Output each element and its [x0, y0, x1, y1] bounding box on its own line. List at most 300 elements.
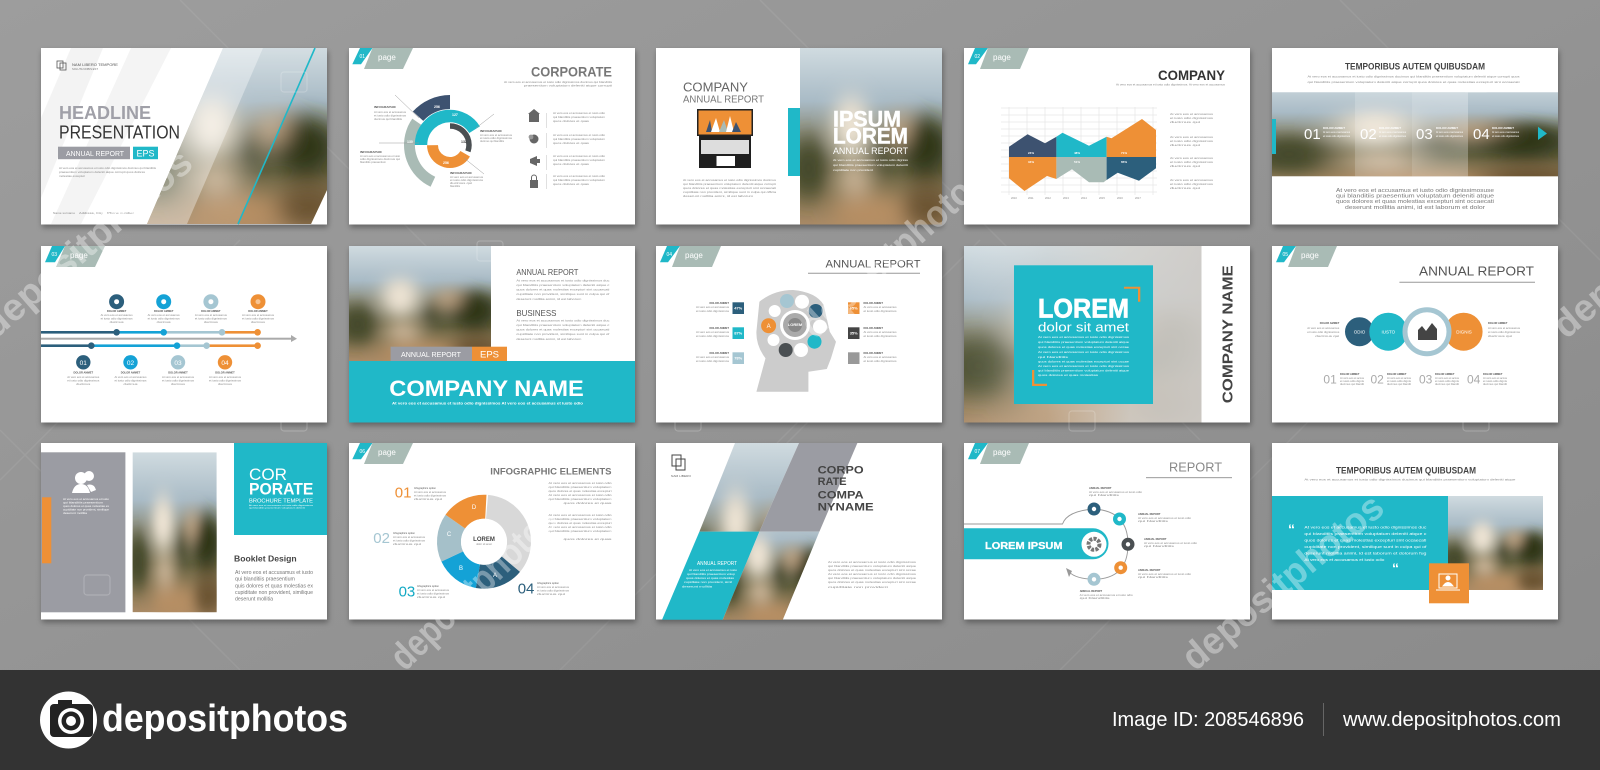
page tag 03: [45, 246, 105, 267]
cyan header block: [234, 443, 327, 535]
right text: DOLOR AMMET: [1488, 321, 1508, 325]
annual report block: cupiditate non provident, similique sunt in culpa qui of: [516, 292, 610, 296]
right text block: quos dolores et quas: [564, 537, 613, 541]
left text: At vero eos et accusamus: [1307, 326, 1340, 330]
card text: quos dolores et quas molestias excepturi sint occae: [1038, 345, 1130, 349]
lorem ipsum: LOREM IPSUM: [985, 540, 1063, 552]
number 04: Infographics option: [537, 581, 559, 585]
ring chart: C: [447, 532, 452, 538]
footer bar: [0, 670, 1600, 770]
subtitle: qui blanditiis praesentium voluptatum deleniti atque corrupti quos dolores et quas molestias excepturi sint occaecati: [1308, 80, 1520, 84]
card text: At vero eos et accusamus et iusto odio dignissimos: [1038, 350, 1130, 354]
numbered list: 04: [1467, 372, 1481, 386]
step labels: At vero eos et accusamus et iusto odio: [1080, 593, 1133, 597]
top labels: At vero eos et accusamus: [148, 313, 180, 317]
corporate company name: NYNAME: [818, 502, 874, 514]
brochure template: BROCHURE TEMPLATE: [249, 499, 313, 505]
cyan parallelogram: [662, 532, 759, 620]
heading on photo: LOREM: [833, 123, 908, 148]
heading on photo: [833, 107, 908, 148]
page tag 01: page: [378, 53, 396, 62]
left stats: 78%: [734, 356, 743, 360]
EPS label: EPS: [480, 350, 499, 360]
body text: quos dolores et quas molestias excepturi sint occae: [828, 580, 917, 584]
right stat text: et iusto odio dignissimos: [864, 334, 897, 338]
booklet heading: Booklet Design: [234, 554, 297, 564]
brand logo: [40, 692, 97, 748]
ring centre label: [473, 537, 495, 546]
vertical company name: COMPANY NAME: [1220, 265, 1237, 403]
page tag 05: page: [1301, 251, 1319, 260]
connector arc: [964, 509, 1128, 579]
logo: SOLUTA NOBIS EST: [72, 68, 99, 71]
left text: DOLOR AMMET: [1320, 321, 1340, 325]
x axis labels: 2014: [1081, 196, 1087, 200]
ring centre label: LOREM: [473, 537, 495, 543]
number 03: Infographics option: [417, 584, 439, 588]
numbered list text: et iusto odio dignis: [1387, 379, 1412, 383]
right text: At vero eos et accusamus: [1488, 326, 1521, 330]
top labels: At vero eos et accusamus: [242, 313, 275, 317]
step labels: At vero eos et accusamus et iusto odio: [1138, 516, 1192, 520]
footer text: Phone number: [107, 211, 134, 215]
quote text: [1304, 526, 1428, 562]
timeline lines: [41, 329, 297, 349]
image id: Image ID: 208546896: [1112, 709, 1304, 731]
page tag 04: 04: [666, 252, 672, 258]
quote text: At vero eos et accusamus et iusto odio dignissimos duc: [1304, 526, 1427, 530]
chart notes: At vero eos et accusamus: [1170, 178, 1214, 182]
bottom labels: ducimus: [171, 382, 186, 386]
left stat text: At vero eos et accusamus: [696, 355, 730, 359]
heading: [249, 465, 313, 498]
step labels: At vero eos et accusamus et iusto odio: [1138, 572, 1192, 576]
annual report on photo: ANNUAL REPORT: [833, 146, 908, 157]
area chart: 65%: [1121, 160, 1127, 164]
numbered circles: 03: [174, 360, 182, 367]
number 03: [399, 584, 450, 601]
body text: cupiditate non provident: [828, 585, 889, 589]
watermarks: [0, 141, 1600, 679]
text on cyan: At vero eos et accusamus et iusto: [689, 568, 737, 572]
area chart: 34%: [1028, 160, 1034, 164]
numbered list text: ducimus qui blandit: [1387, 382, 1411, 386]
right text block: qui blanditiis praesentium voluptatum: [548, 497, 612, 501]
step text: DOLOR AMMET: [1492, 126, 1514, 130]
head nodes: A: [767, 324, 771, 330]
step numbers: [1304, 126, 1490, 143]
body text: At vero eos et accusamus et iusto odio dignissimosuse: [1336, 188, 1494, 194]
label: infographic right: INFOGRAPHIC: [480, 129, 502, 133]
panel: lorem dolor sit amet: [945, 246, 1250, 430]
number 02: ducimus qui: [393, 542, 422, 546]
left stat text: DOLOR AMMET: [710, 351, 729, 355]
watermarks: depositphotos: [793, 158, 996, 347]
page tag 01: [352, 48, 413, 69]
numbered list text: DOLOR AMMET: [1387, 372, 1407, 376]
text on photo: At vero eos et accusamus et iusto odio digniss: [833, 158, 909, 162]
annual report block: [516, 267, 610, 301]
photo: diagonal blurred city: [147, 48, 327, 224]
booklet text: cupiditate non provident, similique: [235, 590, 313, 596]
page tag 06: page: [378, 448, 396, 457]
top labels: DOLOR AMMET: [248, 309, 268, 313]
bottom labels: At vero eos et accusamus: [67, 375, 100, 379]
right text: et iusto odio dignissimos: [1488, 330, 1521, 334]
top labels: DOLOR AMMET: [201, 309, 221, 313]
number 02: Infographics option: [393, 531, 415, 535]
numbered circles: 02: [127, 360, 134, 367]
title: INFOGRAPHIC ELEMENTS: [490, 467, 612, 477]
number 02: 02: [373, 530, 390, 547]
logo: NAM LIBERO TEMPORE: [72, 63, 119, 67]
annual report label: [58, 147, 130, 159]
right stat text: DOLOR AMMET: [864, 301, 883, 305]
page tag 06: [352, 443, 413, 464]
chart notes: At vero eos et accusamus: [1170, 135, 1214, 139]
panel: company area chart: [964, 48, 1250, 224]
label: infographic left: At vero eos et accusamus et iusto: [360, 154, 401, 158]
page tag 07: 07: [974, 449, 980, 455]
subheading: dolor sit amet: [1038, 320, 1129, 335]
label: infographic top left: [374, 105, 407, 121]
overlapping circles: [1345, 310, 1483, 354]
subline: At vero eos et accusamus et iusto odio dignissimos At vero eos et accusamus et iusto odio: [392, 402, 583, 406]
quote text: At vero eos et accusamus et iusto odio: [1304, 558, 1384, 562]
photo: [349, 246, 491, 361]
label: infographic bottom: INFOGRAPHIC: [450, 171, 472, 175]
panel: corporate company diagonal: [656, 443, 942, 630]
bottom labels: ducimus: [218, 382, 233, 386]
numbered list text: DOLOR AMMET: [1483, 372, 1503, 376]
footer text: Name surname: [53, 211, 76, 215]
body text: cupiditate non provident, similique sunt in culpa qui officia: [683, 190, 777, 194]
left stat text: [696, 301, 730, 363]
right stat text: At vero eos et accusamus: [864, 355, 897, 359]
label: infographic right: et iusto odio dignissimos: [480, 136, 513, 140]
panel: corporate brochure: [41, 443, 327, 620]
booklet text: [235, 570, 313, 603]
icon list text: quos dolores et quas: [553, 162, 590, 166]
panel: temporibus quote: [1272, 443, 1558, 620]
brand name: depositphotos: [102, 698, 348, 740]
title: TEMPORIBUS AUTEM QUIBUSDAM: [1336, 465, 1476, 475]
right stat text: At vero eos et accusamus: [864, 305, 897, 309]
text on cyan: [682, 568, 737, 588]
bottom labels: DOLOR AMMET: [74, 370, 93, 374]
quote text: quos dolores et quas molestias excepturi sint occaecati: [1304, 538, 1427, 542]
panel: head infographic: [656, 246, 942, 422]
panel: company name: [338, 246, 635, 422]
icon list text: qui blanditiis praesentium voluptatum: [553, 137, 605, 141]
arrowhead: [1066, 568, 1072, 577]
ring chart: 132: [461, 140, 467, 144]
right text: ducimus qui: [1488, 334, 1513, 338]
bottom labels: DOLOR AMMET: [215, 370, 235, 374]
left stat text: At vero eos et accusamus: [696, 305, 730, 309]
right text block: quos dolores et quas molestias excepturi: [548, 521, 612, 525]
body text: deserunt mollitia animi, id est laborum: [683, 194, 753, 198]
annual report block: At vero eos et accusamus et iusto odio dignissimos duc: [516, 278, 610, 282]
area chart: 51%: [1074, 160, 1080, 164]
step labels: ANNUAL REPORT: [1080, 589, 1103, 593]
numbered list text: et iusto odio dignis: [1483, 379, 1508, 383]
top labels: et iusto odio dignissimos: [101, 316, 133, 320]
right text block: [548, 481, 613, 541]
label: infographic top left: ducimus qui blanditiis: [374, 117, 403, 121]
right text block: At vero eos et accusamus et iusto odio: [548, 481, 612, 485]
left stats: [732, 302, 744, 364]
bottom labels: [67, 370, 242, 386]
number 02: At vero eos et accusamus: [393, 535, 426, 539]
bottom labels: DOLOR AMMET: [168, 370, 188, 374]
numbered list: 03: [1419, 372, 1433, 386]
numbered list: 02: [1370, 372, 1384, 386]
page tag 05: [1276, 246, 1337, 267]
body text: At vero eos et accusamus et iusto odio dignissimos ducimus: [683, 178, 777, 182]
overlapping circles: DIGNIS: [1456, 330, 1472, 334]
label: infographic right: At vero eos et accusamus: [480, 133, 513, 137]
top icons: [109, 294, 265, 309]
top labels: et iusto odio dignissimos: [242, 316, 275, 320]
EPS label: [133, 147, 158, 159]
top labels: et iusto odio dignissimos: [195, 316, 228, 320]
panel: timeline: [41, 246, 327, 422]
annual report block: ANNUAL REPORT: [516, 267, 578, 277]
step numbers: 04: [1473, 126, 1490, 143]
text on cyan: quos dolores et quas molestias: [686, 576, 735, 580]
logo: [57, 61, 119, 71]
x axis labels: 2011: [1028, 196, 1034, 200]
icon list text: [553, 111, 606, 186]
step labels: ANNUAL REPORT: [1138, 568, 1161, 572]
corporate company name: CORPO: [818, 464, 864, 476]
bottom labels: At vero eos et accusamus: [162, 375, 195, 379]
area chart: [1009, 119, 1156, 191]
numbered list text: et iusto odio dignis: [1340, 379, 1365, 383]
annual report label: ANNUAL REPORT: [66, 151, 125, 158]
footer text: [53, 211, 134, 215]
right stat text: [864, 301, 897, 363]
numbered list text: At vero eos et accus: [1435, 376, 1460, 380]
right text block: quos dolores et quas: [564, 501, 613, 505]
panel: temporibus photo strip: [1249, 48, 1581, 224]
icon list text: At vero eos et accusamus et iusto odio: [553, 154, 606, 158]
icon list text: At vero eos et accusamus et iusto odio: [553, 133, 606, 137]
number 03: 03: [399, 584, 415, 601]
right text: [1488, 321, 1521, 338]
number 03: At vero eos et accusamus: [417, 588, 450, 592]
right text block: qui blanditiis praesentium voluptatum: [548, 485, 612, 489]
card text: At vero eos et accusamus et iusto odio dignissimos: [1038, 364, 1130, 368]
body text: At vero eos et accusamus et iusto odio dignissimos ducimus qui blanditiis: [59, 166, 157, 170]
heading: LOREM: [1038, 294, 1129, 324]
top labels: ducimus: [204, 320, 219, 324]
text on cyan: deserunt mollitia: [682, 584, 713, 588]
website: www.depositphotos.com: [1342, 709, 1561, 731]
title: TEMPORIBUS AUTEM QUIBUSDAM: [1345, 61, 1485, 71]
step numbers: 01: [1304, 126, 1321, 143]
step labels: qui blanditiis: [1138, 575, 1169, 579]
number 04: 04: [518, 580, 534, 597]
right stat text: et iusto odio dignissimos: [864, 309, 897, 313]
x axis labels: 2012: [1045, 196, 1051, 200]
corporate company name: RATE: [818, 476, 847, 488]
body text: [1336, 188, 1494, 211]
bottom labels: At vero eos et accusamus: [209, 375, 242, 379]
orange square: [1429, 563, 1469, 603]
top labels: ducimus: [251, 320, 266, 324]
label: infographic bottom: et iusto odio dignissimos: [450, 178, 484, 182]
heading: COR: [249, 465, 287, 484]
x axis labels: 2010: [1011, 196, 1017, 200]
right text block: At vero eos et accusamus et iusto odio: [548, 513, 612, 517]
step numbers: 03: [1416, 126, 1433, 143]
body text: qui blanditiis praesentium voluptatum deleniti atque: [828, 576, 917, 580]
cyan card: [1014, 265, 1153, 404]
business block: qui blanditiis praesentium voluptatum deleniti atque c: [516, 323, 610, 327]
bottom labels: et iusto odio dignissimos: [67, 378, 100, 382]
body text: At vero eos et accusamus et iusto odio dignissimos: [828, 560, 917, 564]
area chart: 48%: [1074, 151, 1080, 155]
panel: corporate donut: [349, 48, 635, 224]
right stat text: At vero eos et accusamus: [864, 330, 897, 334]
left text: [1307, 321, 1340, 338]
label: infographic bottom: ducimus qui: [450, 181, 473, 185]
label: infographic right: ducimus qui blanditiis: [480, 139, 505, 143]
chart notes: ducimus qui: [1170, 120, 1201, 124]
text on cyan: cupiditate non provident, simil: [684, 580, 732, 584]
grid: [1001, 107, 1157, 195]
step labels: [1080, 486, 1198, 600]
header lines: At vero eos et accusamus et iusto odio dignissimos: [249, 504, 313, 507]
chart notes: ducimus qui: [1170, 143, 1201, 147]
text on cyan: qui blanditiis praesentium volup: [687, 572, 736, 576]
numbered list text: ducimus qui blandit: [1340, 382, 1364, 386]
numbered list text: DOLOR AMMET: [1435, 372, 1455, 376]
bottom labels: et iusto odio dignissimos: [209, 378, 242, 382]
subtitle: At vero eos et accusamus et iusto odio dignissimos ducimus qui blanditiis praesentium voluptatum deleniti atque: [1304, 478, 1516, 482]
subtitle: At vero eos et accusamus et iusto odio dignissimos ducimus qui blanditiis praesentium voluptatum deleniti atque corrupti quos: [1308, 74, 1521, 78]
booklet text: qui blanditiis praesentium: [235, 577, 295, 583]
top labels: ducimus: [157, 320, 172, 324]
step circles: [1088, 502, 1134, 586]
quote marks: [1288, 521, 1399, 576]
ring centre label: dolor sit amet: [476, 542, 492, 546]
photo strip: [1249, 79, 1581, 194]
EPS label: EPS: [136, 148, 155, 158]
corporate company name: [818, 464, 874, 514]
left stat text: DOLOR AMMET: [710, 301, 729, 305]
number 03: ducimus qui: [417, 595, 446, 599]
number 04: ducimus qui: [537, 592, 566, 596]
icon: people: [72, 471, 96, 493]
icon list text: At vero eos et accusamus et iusto odio: [553, 174, 606, 178]
photo: [800, 48, 942, 224]
card text: At vero eos et accusamus et iusto odio dignissimos: [1038, 335, 1130, 339]
numbered list text: et iusto odio dignis: [1435, 379, 1460, 383]
right text block: qui blanditiis praesentium voluptatum: [548, 517, 612, 521]
business block: [516, 308, 610, 341]
top labels: At vero eos et accusamus: [101, 313, 133, 317]
ring chart: [435, 492, 533, 591]
left text: et iusto odio dignissimos: [1307, 330, 1340, 334]
bottom labels: et iusto odio dignissimos: [162, 378, 195, 382]
logo: NAM LIBERO: [671, 474, 691, 478]
card text: quos dolores et quas molestias: [1038, 373, 1099, 377]
body text: [683, 178, 777, 198]
right text block: At vero eos et accusamus et iusto odio: [548, 493, 612, 497]
right stat text: et iusto odio dignissimos: [864, 359, 897, 363]
numbered circles: 04: [221, 360, 229, 367]
photo: [1448, 496, 1543, 590]
ring chart: 130: [407, 140, 413, 144]
x axis labels: 2015: [1099, 196, 1105, 200]
numbered list text: At vero eos et accus: [1340, 376, 1365, 380]
top labels: DOLOR AMMET: [154, 309, 174, 313]
quote marks: “: [1288, 521, 1295, 537]
icon list text: qui blanditiis praesentium voluptatum: [553, 115, 605, 119]
cyan band: [349, 361, 635, 422]
orange accent: [42, 497, 51, 563]
number 01: At vero eos et accusamus: [414, 490, 447, 494]
corporate company name: COMPA: [818, 489, 864, 501]
column text: At vero eos et accusamus et iusto: [63, 497, 109, 501]
step labels: qui blanditiis: [1080, 596, 1111, 600]
label: infographic left: INFOGRAPHIC: [360, 150, 382, 154]
left stat text: et iusto odio dignissimos: [696, 334, 730, 338]
ring chart: 256: [443, 161, 449, 165]
body text: qui blanditiis praesentium voluptatum deleniti atque: [828, 564, 917, 568]
chart notes: et iusto odio dignissimos: [1170, 182, 1214, 186]
body text: molestias excepturi: [59, 174, 85, 178]
ring chart: B: [459, 566, 463, 572]
right text block: At vero eos et accusamus et iusto odio: [548, 525, 612, 529]
title: COMPANY: [683, 80, 748, 95]
numbered list text: At vero eos et accus: [1483, 376, 1508, 380]
title: COMPANY: [1158, 67, 1226, 83]
top labels: DOLOR AMMET: [107, 309, 127, 313]
annual report on cyan: ANNUAL REPORT: [697, 561, 737, 567]
footer text: Address, City: [79, 211, 104, 215]
top labels: At vero eos et accusamus: [195, 313, 228, 317]
x axis labels: [1011, 196, 1141, 200]
body text: quos dolores et quas molestias excepturi sint occae: [828, 568, 917, 572]
watermark cameras: [84, 72, 1489, 595]
subtitle: [504, 80, 613, 87]
page tag 02: page: [993, 53, 1011, 62]
right stats: [848, 302, 860, 364]
icon list text: quos dolores et quas: [553, 182, 590, 186]
column text: qui blanditiis praesentium: [63, 500, 104, 504]
page tag 02: 02: [974, 54, 980, 60]
step labels: qui blanditiis: [1144, 544, 1175, 548]
chart notes: At vero eos et accusamus: [1170, 112, 1214, 116]
card text: qui blanditiis praesentium voluptatum deleniti atque: [1038, 340, 1130, 344]
top labels: et iusto odio dignissimos: [148, 316, 180, 320]
left text: ducimus qui: [1315, 334, 1340, 338]
icon: head silhouette: [756, 290, 836, 392]
numbered list text: ducimus qui blandit: [1483, 382, 1507, 386]
text on photo: qui blanditiis praesentium voluptatum deleniti: [833, 163, 908, 167]
overlapping circles: IUSTO: [1381, 330, 1396, 334]
numbered list: 01: [1323, 372, 1337, 386]
ring chart: A: [493, 573, 497, 579]
numbered list text: DOLOR AMMET: [1340, 372, 1360, 376]
heading: HEADLINE: [59, 103, 151, 123]
body text: qui blanditiis praesentium voluptatum deleniti atque: [1336, 194, 1494, 200]
page tag 01: 01: [360, 54, 365, 60]
